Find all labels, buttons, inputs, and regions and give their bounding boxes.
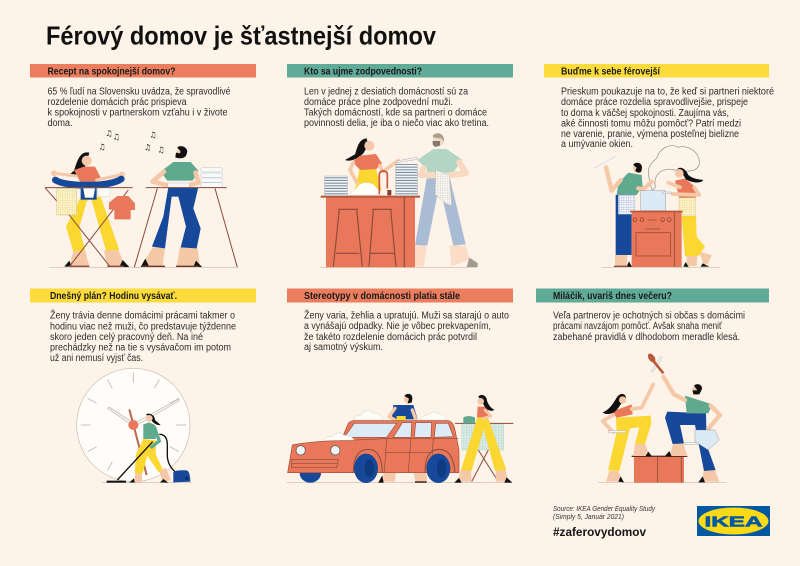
text block: stereotypy <box>304 308 509 353</box>
text block: férovosť: Prieskum poukazuje na to, že keď si partneri niektoré <box>561 86 774 98</box>
text block: férovosť: a umývanie okien. <box>561 139 633 150</box>
heading bar: dnešný plán: Dnešný plán? Hodinu vysávať. <box>50 291 177 302</box>
man folding towels <box>134 146 237 267</box>
illustration: woman vacuuming in front of clock <box>77 368 192 483</box>
text block: zodpovednosť: domáce práce plne zodpovední muži. <box>304 97 453 108</box>
text block: miláčik <box>553 310 745 343</box>
text block: miláčik: zabehané pravidlá v dlhodobom meradle klesá. <box>553 332 740 343</box>
illustration: couple cooking at stove <box>594 146 720 267</box>
text block: férovosť <box>561 86 774 150</box>
text block: dnešný plán: prechádzky než na tie s vysávačom im potom <box>50 343 231 354</box>
source note: (Simply 5, Január 2021) <box>553 514 624 521</box>
music notes: ♫ <box>105 129 112 138</box>
text block: recept <box>48 86 231 129</box>
man washing the car <box>389 394 418 421</box>
music notes: ♫ <box>149 130 156 139</box>
counter with stools <box>321 196 420 267</box>
steam cloud <box>648 146 699 189</box>
text block: zodpovednosť: povinnosti delia, je iba o niečo viac ako tretina. <box>304 118 489 129</box>
text block: férovosť: aké činnosti tomu môžu pomôcť? Patrí medzi <box>561 118 741 129</box>
text block: recept: doma. <box>48 118 72 129</box>
text block: recept: 65 % ľudí na Slovensku uvádza, že spravodlivé <box>48 86 231 98</box>
text block: férovosť: domáce práce rozdelia spravodlivejšie, prispeje <box>561 97 748 108</box>
text block: stereotypy: že takéto rozdelenie domácich prác potvrdil <box>304 332 477 343</box>
heading bar: stereotypy <box>287 288 513 302</box>
heading bar: zodpovednosť <box>287 64 513 78</box>
woman washing dishes <box>345 138 398 190</box>
music notes <box>98 129 164 155</box>
illustration: man washing car, woman ironing <box>287 394 513 483</box>
heading bar: recept: Recept na spokojnejší domov? <box>48 66 176 78</box>
man <box>663 377 720 482</box>
text block: zodpovednosť: Takých domácností, kde sa partneri o domáce <box>304 108 487 118</box>
heading bar: zodpovednosť: Kto sa ujme zodpovednosti? <box>304 66 422 78</box>
panel: buďme k sebe férovejší <box>544 64 774 267</box>
spoon and wrench <box>646 352 663 373</box>
icon: IKEA logo <box>697 506 770 536</box>
vacuum cleaner <box>107 434 190 483</box>
woman at the stove <box>668 168 712 267</box>
heading bar: férovosť: Buďme k sebe férovejší <box>561 66 661 78</box>
text block: férovosť: to doma k väčšej spokojnosti. Zaujíma vás, <box>561 108 729 119</box>
heading bar: férovosť <box>544 64 769 78</box>
text block: zodpovednosť <box>304 86 489 129</box>
cabinet <box>632 456 687 483</box>
illustration: couple ironing and folding laundry <box>45 129 237 267</box>
text block: recept: rozdelenie domácich prác prispieva <box>48 97 187 108</box>
text block: miláčik: prácami navzájom pomôcť. Avšak snaha meniť <box>553 321 722 332</box>
text block: dnešný plán: hodinu viac než muži, čo predstavuje týždenne <box>50 322 236 332</box>
woman ironing <box>454 395 513 483</box>
heading bar: stereotypy: Stereotypy v domácnosti platia stále <box>304 291 460 302</box>
heading bar: miláčik <box>536 288 769 302</box>
music notes: ♫ <box>157 146 164 155</box>
man with window squeegee <box>594 156 652 267</box>
heading bar: recept <box>30 64 256 78</box>
music notes: ♫ <box>113 132 120 141</box>
text block: dnešný plán: skoro jeden celý pracovný deň. Na iné <box>50 332 203 343</box>
source note: Source: IKEA Gender Equality Study <box>553 506 655 513</box>
panel: miláčik <box>536 288 769 483</box>
stove with pot <box>630 191 683 267</box>
icon: IKEA logo: IKEA <box>704 514 763 530</box>
hashtag: #zaferovydomov <box>553 525 646 539</box>
text block: férovosť: ne varenie, pranie, výmena posteľnej bielizne <box>561 129 739 140</box>
illustration: couple washing dishes <box>319 133 478 267</box>
music notes: ♫ <box>98 142 105 151</box>
text block: dnešný plán <box>50 308 236 364</box>
faded man drying dishes <box>415 133 478 267</box>
text block: stereotypy: Ženy varia, žehlia a upratujú. Muži sa starajú o auto <box>304 308 509 322</box>
clock <box>77 368 190 482</box>
woman ironing <box>51 152 129 267</box>
illustration: couple high five with tools <box>598 352 727 483</box>
panel: kto sa ujme zodpovednosti <box>287 64 513 267</box>
man's legs <box>378 472 427 483</box>
panel: dnešný plán <box>30 288 256 483</box>
woman vacuuming <box>129 414 171 483</box>
text block: dnešný plán: už ani nemusí vyjsť čas. <box>50 353 143 364</box>
text block: recept: k spokojnosti v partnerskom vzťahu i v živote <box>48 108 228 118</box>
plates, sink and faucet <box>325 157 417 196</box>
heading bar: miláčik: Miláčik, uvariš dnes večeru? <box>553 291 672 302</box>
text block: stereotypy: a vynášajú odpadky. Nie je vôbec prekvapením, <box>304 321 491 332</box>
music notes: ♫ <box>144 143 151 152</box>
panel: recept na spokojnejší domov <box>30 64 256 267</box>
text block: stereotypy: aj samotný výskum. <box>304 342 383 353</box>
source note <box>553 506 655 521</box>
woman <box>603 384 653 482</box>
title: Férový domov je šťastnejší domov <box>46 20 436 50</box>
car <box>288 421 459 483</box>
foam on the car roof <box>353 411 447 420</box>
text block: zodpovednosť: Len v jednej z desiatich domácností sú za <box>304 86 468 98</box>
heading bar: dnešný plán <box>30 288 256 302</box>
text block: miláčik: Veľa partnerov je ochotných si občas s domácimi <box>553 310 745 322</box>
ironing board with laundry <box>45 188 135 267</box>
panel: stereotypy <box>287 288 513 483</box>
text block: dnešný plán: Ženy trávia denne domácimi prácami takmer o <box>50 308 235 322</box>
